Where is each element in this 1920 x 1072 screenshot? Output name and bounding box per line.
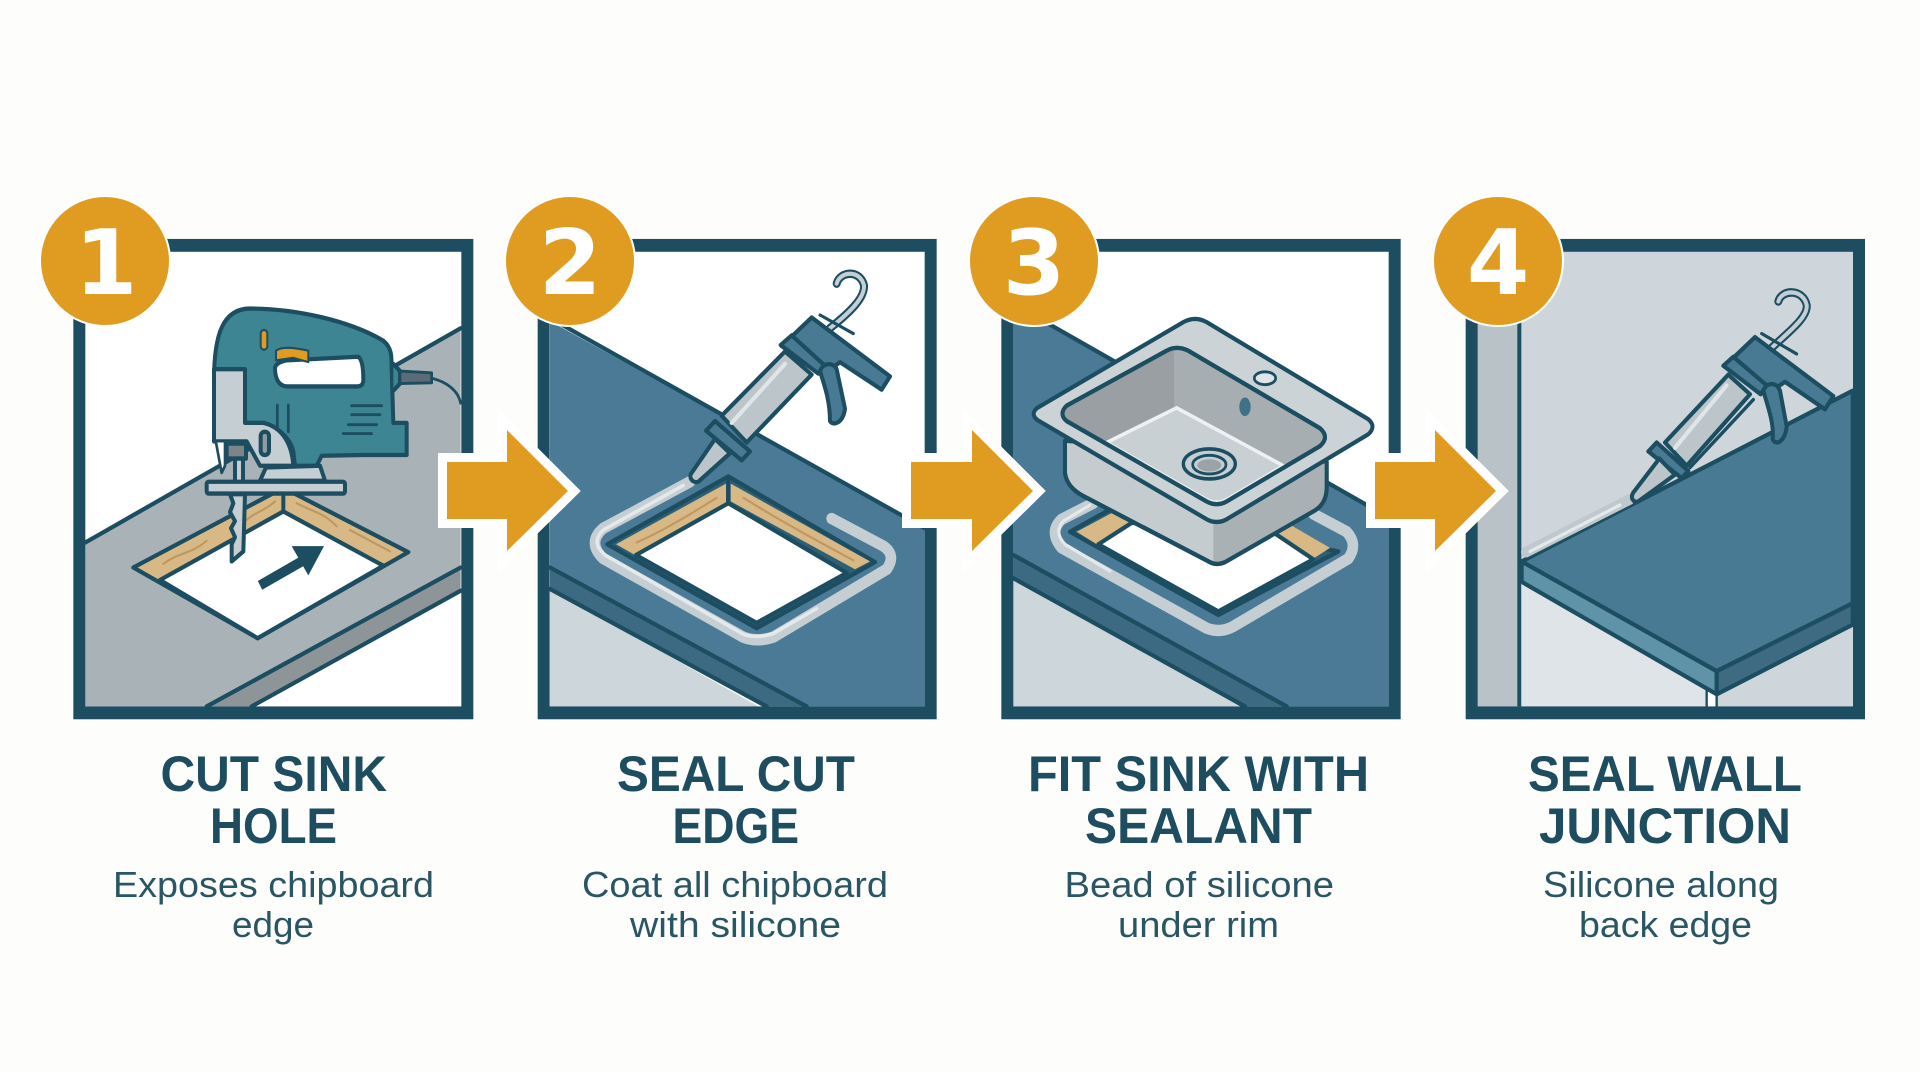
text: step 3 description: Bead of silicone — [1064, 864, 1334, 905]
heading: step 4: JUNCTION — [1539, 798, 1791, 854]
number badge 4: 4 — [1467, 211, 1529, 316]
heading: step 2: EDGE — [672, 798, 799, 854]
heading: step 1 — [160, 746, 387, 854]
wall background — [1472, 245, 1859, 713]
worktop — [1522, 391, 1853, 694]
arrow: step 3 to 4 — [1375, 430, 1496, 551]
text: step 4 description: back edge — [1579, 904, 1752, 945]
worktop leg — [1707, 687, 1717, 706]
icon: silicone gun — [1632, 292, 1833, 502]
text: step 2 description: with silicone — [629, 904, 841, 945]
worktop surface — [550, 321, 925, 706]
heading: step 2 — [617, 746, 855, 854]
worktop surface — [1013, 303, 1389, 706]
area under the worktop — [1521, 584, 1717, 706]
cut-out hole with sealed chipboard edge — [607, 476, 875, 628]
number badge 2 — [505, 196, 635, 326]
worktop front edge — [85, 328, 461, 706]
icon: silicone gun — [690, 274, 890, 482]
number badge 3: 3 — [1003, 211, 1065, 316]
icon: sink — [1034, 319, 1372, 564]
heading: step 2: SEAL CUT — [617, 746, 855, 802]
frame — [544, 245, 931, 713]
worktop surface — [85, 328, 461, 706]
text: step 1 description: Exposes chipboard — [113, 864, 434, 905]
panel: step 2 seal cut edge — [544, 245, 931, 713]
text: step 2 description — [582, 864, 888, 945]
panel: step 4 seal wall junction — [1472, 245, 1859, 713]
heading: step 4: SEAL WALL — [1528, 746, 1802, 802]
text: step 1 description: edge — [232, 904, 314, 945]
number badge 1 — [40, 196, 170, 326]
heading: step 3: FIT SINK WITH — [1028, 746, 1369, 802]
number badge 2: 2 — [539, 211, 601, 316]
text: step 1 description — [113, 864, 434, 945]
silicone bead — [1055, 503, 1353, 631]
text: step 4 description — [1543, 864, 1779, 945]
silicone bead — [595, 482, 891, 640]
panel: step 3 fit sink with sealant — [1007, 245, 1395, 713]
number badge 3 — [969, 196, 1099, 326]
worktop front edge — [550, 325, 925, 706]
cut-out hole — [1070, 506, 1338, 615]
number badge 1: 1 — [75, 211, 137, 316]
worktop front edge — [1013, 325, 1389, 706]
cut-out hole with chipboard edge — [133, 488, 408, 638]
frame — [1007, 245, 1395, 713]
heading: step 1: CUT SINK — [160, 746, 387, 802]
arrow: step 2 to 3 — [911, 430, 1033, 551]
text: step 3 description — [1064, 864, 1334, 945]
heading: step 1: HOLE — [210, 798, 337, 854]
icon: direction arrow — [260, 546, 324, 585]
arrow: step 1 to 2 — [447, 430, 568, 551]
heading: step 4 — [1528, 746, 1802, 854]
text: step 4 description: Silicone along — [1543, 864, 1779, 905]
icon: jigsaw — [207, 309, 461, 561]
text: step 3 description: under rim — [1118, 904, 1279, 945]
frame — [79, 245, 467, 713]
text: step 2 description: Coat all chipboard — [582, 864, 888, 905]
number badge 4 — [1433, 196, 1563, 326]
silicone bead — [1526, 500, 1629, 552]
heading: step 3: SEALANT — [1085, 798, 1312, 854]
panel: step 1 cut sink hole — [79, 245, 467, 713]
wall strip — [1478, 252, 1519, 706]
frame — [1472, 245, 1859, 713]
heading: step 3 — [1028, 746, 1369, 854]
